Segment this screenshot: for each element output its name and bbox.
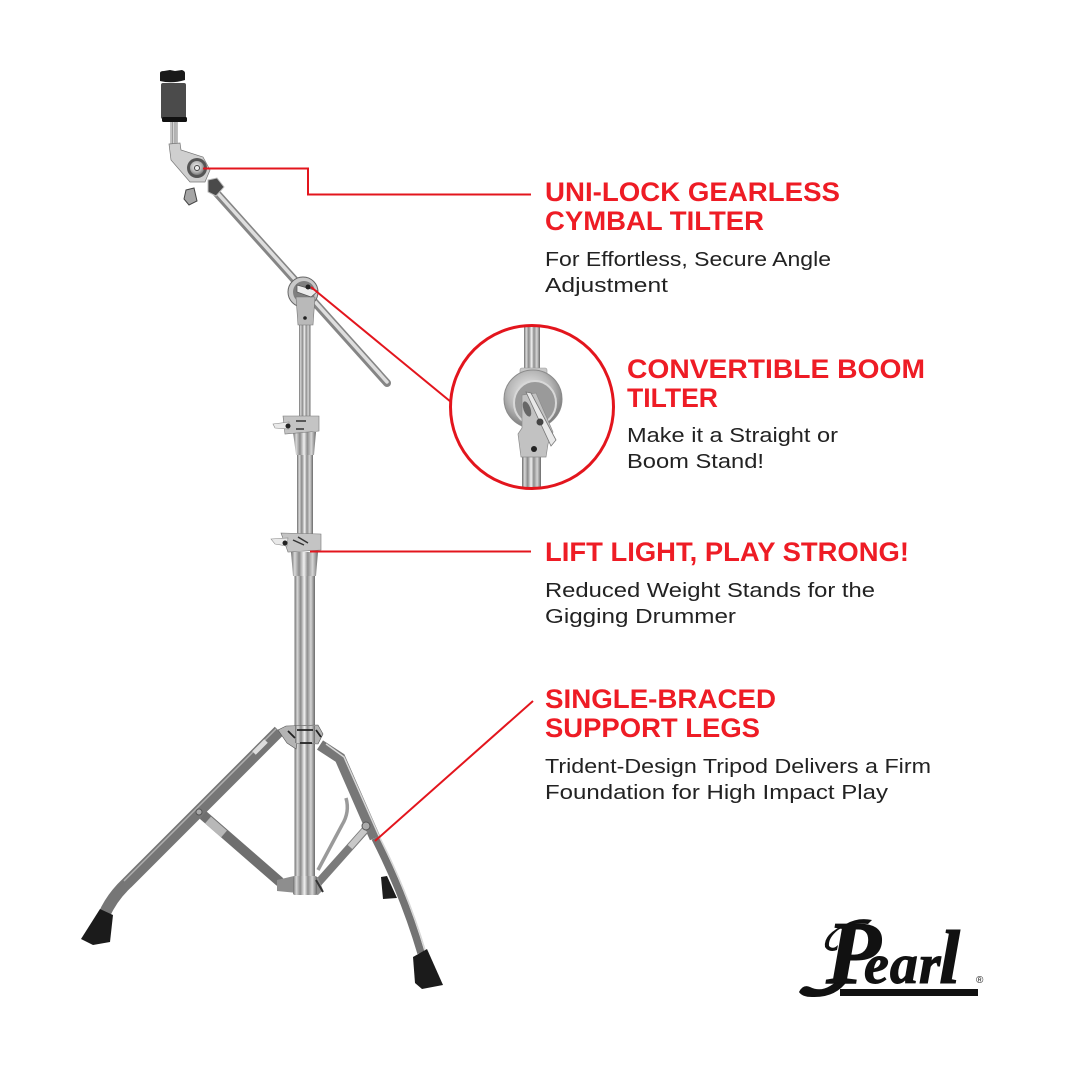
heading: TILTER [627,383,718,413]
description: For Effortless, Secure Angle [545,248,831,271]
description: Foundation for High Impact Play [545,781,889,804]
right foot [413,949,443,989]
callout text: convertible boom tilter [627,354,925,473]
lower tube [294,574,315,879]
cymbal tilter body [169,143,210,182]
boom arm [213,188,387,383]
middle tube [297,452,313,537]
description: Boom Stand! [627,450,764,473]
lower washer [162,117,187,122]
inset lower tube [522,457,541,487]
callout text: lift light [545,537,909,628]
inset inner ring [514,381,556,425]
logo swash [799,919,872,997]
back foot [381,876,397,899]
magnified boom tilter inset [450,322,614,491]
callout line: support legs [375,701,533,841]
description: Adjustment [545,274,668,297]
inset ball joint [504,370,562,428]
description: Trident-Design Tripod Delivers a Firm [545,755,931,778]
callout text: uni-lock tilter [545,177,840,297]
logo wordmark: ear [864,934,942,996]
wing nut [160,70,185,82]
right leg [320,744,425,953]
heading: CONVERTIBLE BOOM [627,354,925,384]
right brace [318,828,367,883]
upper clamp [273,416,319,434]
heading: SUPPORT LEGS [545,713,760,743]
left brace [203,815,280,882]
heading: UNI-LOCK GEARLESS [545,177,840,207]
adjuster bolt [184,188,197,205]
lower collar [291,552,318,576]
upper tube [299,320,310,420]
top leg bracket [278,725,323,749]
illustration: boom cymbal stand [81,70,443,989]
registered mark: ® [976,975,984,986]
heading: CYMBAL TILTER [545,206,764,236]
inset upper tube [524,327,540,368]
lower clamp [271,533,321,552]
boom clamp [208,178,224,196]
logo wordmark: P [825,904,882,1003]
inset plate and bracket [518,393,553,457]
heading: SINGLE-BRACED [545,684,776,714]
callout line: lift light [310,550,531,552]
logo underline [840,989,978,996]
inset collar [520,368,548,374]
cymbal felt [161,83,186,119]
boom tilter knuckle [288,277,318,325]
callout line: cymbal tilter [203,168,531,194]
inset lever [526,392,556,446]
heading: LIFT LIGHT, PLAY STRONG! [545,537,909,567]
description: Reduced Weight Stands for the [545,579,875,602]
description: Make it a Straight or [627,424,838,447]
callout line: boom tilter [311,287,451,402]
left leg [104,729,279,915]
inset ring [450,326,614,488]
upper collar [293,432,316,455]
logo wordmark: l [939,916,960,1000]
inner support strut [318,798,347,870]
callout text: support legs [545,684,931,804]
left foot [81,909,113,945]
bottom leg bracket [277,876,323,895]
description: Gigging Drummer [545,605,736,628]
logo: Pearl [799,904,984,1003]
cymbal tilter post [170,120,178,146]
brace pivots [196,809,370,830]
